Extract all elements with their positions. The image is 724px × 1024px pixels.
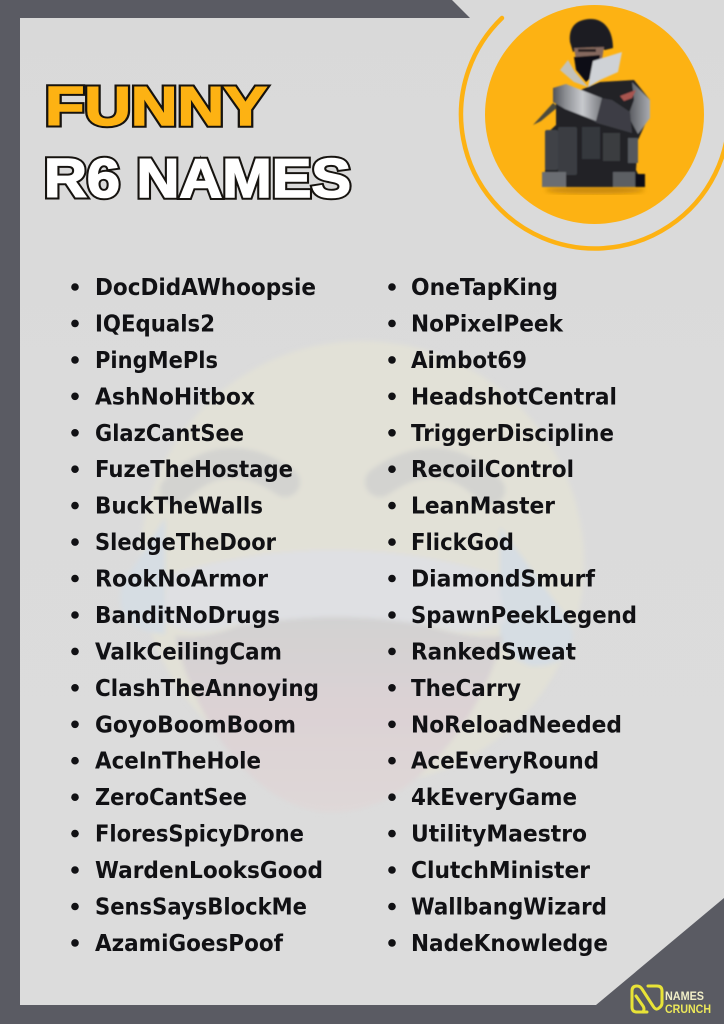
names list: left column: ClashTheAnnoying — [95, 676, 319, 702]
knife — [533, 103, 558, 125]
names list: right column: NoReloadNeeded — [411, 712, 622, 738]
title line: FUNNY: FUNNY — [45, 75, 267, 137]
right shoulder sleeve — [628, 82, 650, 134]
face mask — [574, 55, 600, 82]
names list: left column: BuckTheWalls — [95, 494, 263, 520]
names list: right column: OneTapKing — [411, 275, 558, 301]
names list: left column: AceInTheHole — [95, 749, 261, 775]
emoji mask — [165, 550, 505, 632]
eyes — [578, 49, 596, 52]
logo: Names Crunch — [632, 986, 711, 1016]
emoji left tear — [120, 518, 165, 634]
names list: right column: NadeKnowledge — [411, 931, 608, 957]
names list: right column: FlickGod — [411, 530, 514, 556]
names list: left column: ValkCeilingCam — [95, 639, 282, 665]
emoji left eye — [175, 463, 285, 490]
logo wordmark: NAMES — [665, 991, 704, 1003]
decorative orange arc — [461, 18, 724, 248]
names list: right column: TheCarry — [411, 676, 521, 702]
names list: right column: DiamondSmurf — [411, 566, 596, 592]
emoji right eye — [380, 463, 490, 490]
orange circle — [485, 5, 704, 224]
names list: left column: AzamiGoesPoof — [95, 931, 284, 957]
beanie — [570, 19, 613, 52]
names list: left column: AshNoHitbox — [95, 384, 255, 410]
emoji mouth — [175, 617, 503, 812]
title line: FUNNY: FUNNY — [45, 75, 267, 137]
background emoji: laughing face with mask — [120, 341, 584, 812]
names list: right column: SpawnPeekLegend — [411, 603, 637, 629]
character shadow — [545, 186, 645, 194]
names list: right column: AceEveryRound — [411, 749, 599, 775]
names list: left column: RookNoArmor — [95, 566, 269, 592]
names list: left column: FuzeTheHostage — [95, 457, 293, 483]
light forearm with hand — [553, 84, 602, 121]
names list: right column: WallbangWizard — [411, 894, 607, 920]
title line: R6 NAMES: R6 NAMES — [44, 147, 351, 209]
vest pouches — [542, 127, 645, 187]
names list: right column: UtilityMaestro — [411, 822, 587, 848]
dark forearm — [588, 96, 632, 133]
title — [44, 75, 351, 209]
names list: right column: Aimbot69 — [411, 348, 527, 374]
names list: right column: NoPixelPeek — [411, 311, 564, 337]
names list: left column: ZeroCantSee — [95, 785, 247, 811]
names list: right column: RankedSweat — [411, 639, 576, 665]
torso — [542, 80, 650, 187]
names list: left column: GoyoBoomBoom — [95, 712, 296, 738]
names list: right column: ClutchMinister — [411, 858, 591, 884]
names list: left column: BanditNoDrugs — [95, 603, 280, 629]
logo N icon — [632, 986, 662, 1012]
face — [574, 47, 604, 60]
names list: left column: GlazCantSee — [95, 421, 244, 447]
logo wordmark — [665, 991, 711, 1016]
emoji right tear — [500, 527, 573, 666]
names list: left column: IQEquals2 — [95, 311, 215, 337]
names list: left column: DocDidAWhoopsie — [95, 275, 316, 301]
title line: R6 NAMES: R6 NAMES — [44, 147, 351, 209]
left collar — [560, 60, 588, 87]
names list: left column — [71, 275, 323, 957]
emoji face — [140, 341, 584, 785]
right collar — [588, 52, 622, 87]
names list: right column — [388, 275, 637, 957]
names list: right column: LeanMaster — [411, 494, 556, 520]
names list: right column: TriggerDiscipline — [411, 421, 614, 447]
shoulder patch — [620, 90, 636, 101]
operator character illustration — [533, 19, 650, 187]
logo wordmark: CRUNCH — [665, 1004, 711, 1016]
names list: left column: PingMePls — [95, 348, 218, 374]
names list: left column: SledgeTheDoor — [95, 530, 277, 556]
names list: right column: RecoilControl — [411, 457, 574, 483]
names list: right column: 4kEveryGame — [411, 785, 577, 811]
names list: left column: SensSaysBlockMe — [95, 894, 307, 920]
names list: right column: HeadshotCentral — [411, 384, 617, 410]
names list: left column: WardenLooksGood — [95, 858, 323, 884]
names list: left column: FloresSpicyDrone — [95, 822, 304, 848]
